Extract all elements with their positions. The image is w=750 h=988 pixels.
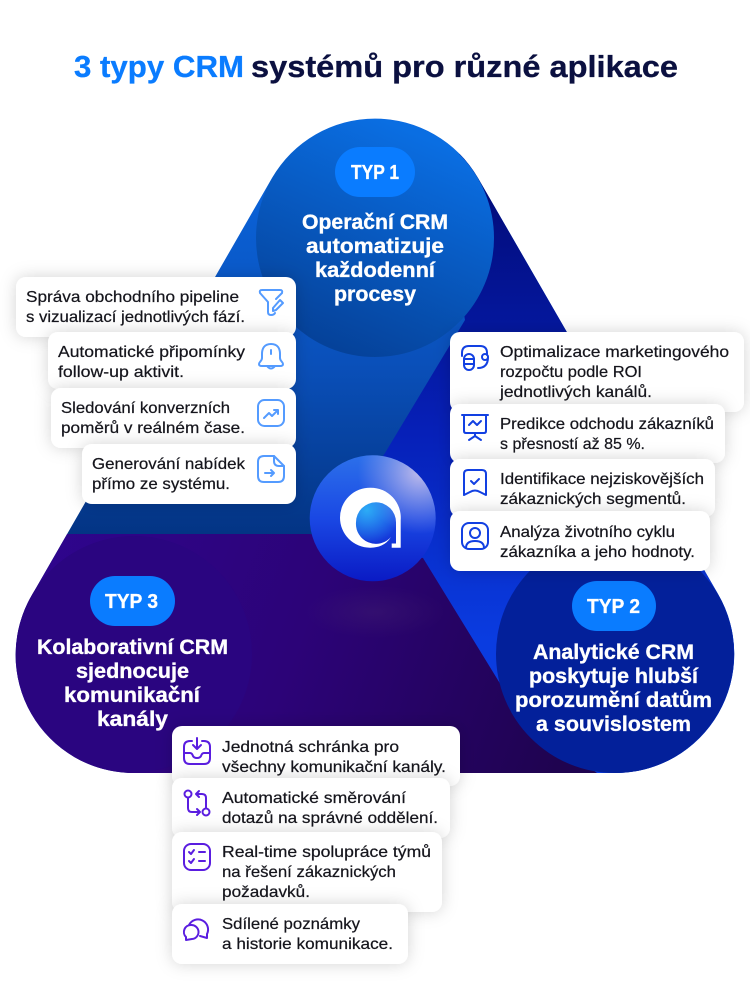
text: nabídky xyxy=(92,456,246,493)
icon: document xyxy=(258,456,284,482)
text: jednotná schránka xyxy=(222,739,446,776)
text: sdílené poznámky: a historie komunikace. xyxy=(222,936,393,953)
title xyxy=(74,49,678,84)
pill: typ 2: TYP 2 xyxy=(587,595,640,618)
heading: typ 3: komunikační xyxy=(64,684,201,707)
card: predikce odchodu xyxy=(450,404,725,463)
text: směrování dotazů xyxy=(222,790,438,827)
text: připomínky: Automatické připomínky xyxy=(58,344,245,361)
text: segmenty: Identifikace nejziskovějších xyxy=(500,471,704,488)
icon: checklist xyxy=(184,844,210,870)
heading: typ 1: Operační CRM xyxy=(302,211,448,234)
icon: bell xyxy=(259,344,283,368)
text: nabídky: Generování nabídek xyxy=(92,456,246,473)
text: připomínky xyxy=(58,344,245,381)
card: real-time spolupráce xyxy=(172,832,442,912)
heading: typ 2: porozumění datům xyxy=(515,689,712,712)
title: 3 typy CRM xyxy=(74,49,244,84)
card: životní cyklus xyxy=(450,511,710,571)
heading: typ 2: Analytické CRM xyxy=(533,641,694,664)
pill: typ 3 xyxy=(90,576,175,626)
text: sdílené poznámky: Sdílené poznámky xyxy=(222,916,360,933)
text: real-time spolupráce xyxy=(222,843,431,901)
heading: typ 2 xyxy=(515,641,712,736)
text: konverzní poměry: poměrů v reálném čase. xyxy=(61,419,245,437)
panel: typ 3 xyxy=(16,536,252,772)
icon: routing xyxy=(184,790,210,816)
pill: typ 1 xyxy=(335,147,415,197)
pill: typ 1: TYP 1 xyxy=(351,161,399,184)
icon: bookmark xyxy=(464,470,486,495)
icon: person xyxy=(462,523,488,549)
heading: typ 3: sjednocuje xyxy=(76,660,189,683)
card: správa pipeline xyxy=(16,277,296,337)
icon: coins xyxy=(462,346,488,370)
text: konverzní poměry: Sledování konverzních xyxy=(61,400,230,417)
text: sdílené poznámky xyxy=(222,916,393,953)
card: konverzní poměry xyxy=(51,388,296,448)
text: jednotná schránka: Jednotná schránka pro xyxy=(222,739,399,756)
text: predikce odchodu xyxy=(500,415,714,453)
icon: presentation xyxy=(462,415,488,440)
heading: typ 1: procesy xyxy=(334,283,416,306)
heading: typ 2: poskytuje hlubší xyxy=(529,665,699,688)
text: marketingový rozpočet: rozpočtu podle ROI xyxy=(500,364,642,381)
text: real-time spolupráce: na řešení zákaznických xyxy=(222,864,396,881)
text: životní cyklus: Analýza životního cyklu xyxy=(500,524,675,541)
text: životní cyklus: zákazníka a jeho hodnoty. xyxy=(500,544,695,561)
logo badge xyxy=(310,455,436,581)
card: sdílené poznámky xyxy=(172,904,408,964)
pill: typ 3: TYP 3 xyxy=(105,590,158,613)
icon: chart xyxy=(258,400,284,426)
text: správa pipeline xyxy=(26,289,245,326)
heading: typ 1: automatizuje xyxy=(306,235,444,258)
text: nabídky: přímo ze systému. xyxy=(92,476,230,493)
heading: typ 1: každodenní xyxy=(315,259,436,282)
card: marketingový rozpočet xyxy=(450,332,744,412)
text: predikce odchodu: s přesností až 85 %. xyxy=(500,436,645,453)
heading: typ 3: kanály xyxy=(97,708,168,731)
icon: inbox xyxy=(184,738,210,764)
text: životní cyklus xyxy=(500,524,695,561)
text: real-time spolupráce: Real-time spolupráce týmů xyxy=(222,843,431,861)
heading: typ 1 xyxy=(302,211,448,306)
panel: typ 1 xyxy=(256,119,494,357)
icon: chat bubbles xyxy=(184,919,208,940)
card: připomínky xyxy=(48,332,296,389)
triangle background xyxy=(0,100,750,790)
pill: typ 2 xyxy=(572,581,656,631)
text: marketingový rozpočet: jednotlivých kanálů. xyxy=(499,383,652,401)
card: segmenty xyxy=(450,459,715,517)
heading: typ 2: a souvislostem xyxy=(536,713,691,736)
heading: typ 3 xyxy=(37,636,228,731)
text: konverzní poměry xyxy=(61,400,245,437)
card: jednotná schránka xyxy=(172,726,460,786)
text: směrování dotazů: dotazů na správné oddělení. xyxy=(222,809,438,827)
text: marketingový rozpočet xyxy=(499,344,729,401)
text: segmenty: zákaznických segmentů. xyxy=(500,490,686,508)
text: směrování dotazů: Automatické směrování xyxy=(222,790,407,807)
text: predikce odchodu: Predikce odchodu zákazníků xyxy=(500,415,714,433)
text: segmenty xyxy=(500,471,704,508)
text: real-time spolupráce: požadavků. xyxy=(222,883,310,901)
icon: funnel xyxy=(260,290,283,315)
text: marketingový rozpočet: Optimalizace marketingového xyxy=(500,344,729,361)
text: jednotná schránka: všechny komunikační kanály. xyxy=(222,759,446,776)
heading: typ 3: Kolaborativní CRM xyxy=(37,636,228,659)
card: směrování dotazů xyxy=(172,778,450,838)
card: nabídky xyxy=(82,444,296,504)
text: správa pipeline: s vizualizací jednotlivých fází. xyxy=(26,309,245,326)
text: připomínky: follow-up aktivit. xyxy=(58,364,184,381)
text: správa pipeline: Správa obchodního pipeline xyxy=(26,289,239,306)
panel: typ 2 xyxy=(496,535,734,773)
title: systémů pro různé aplikace xyxy=(251,49,678,84)
